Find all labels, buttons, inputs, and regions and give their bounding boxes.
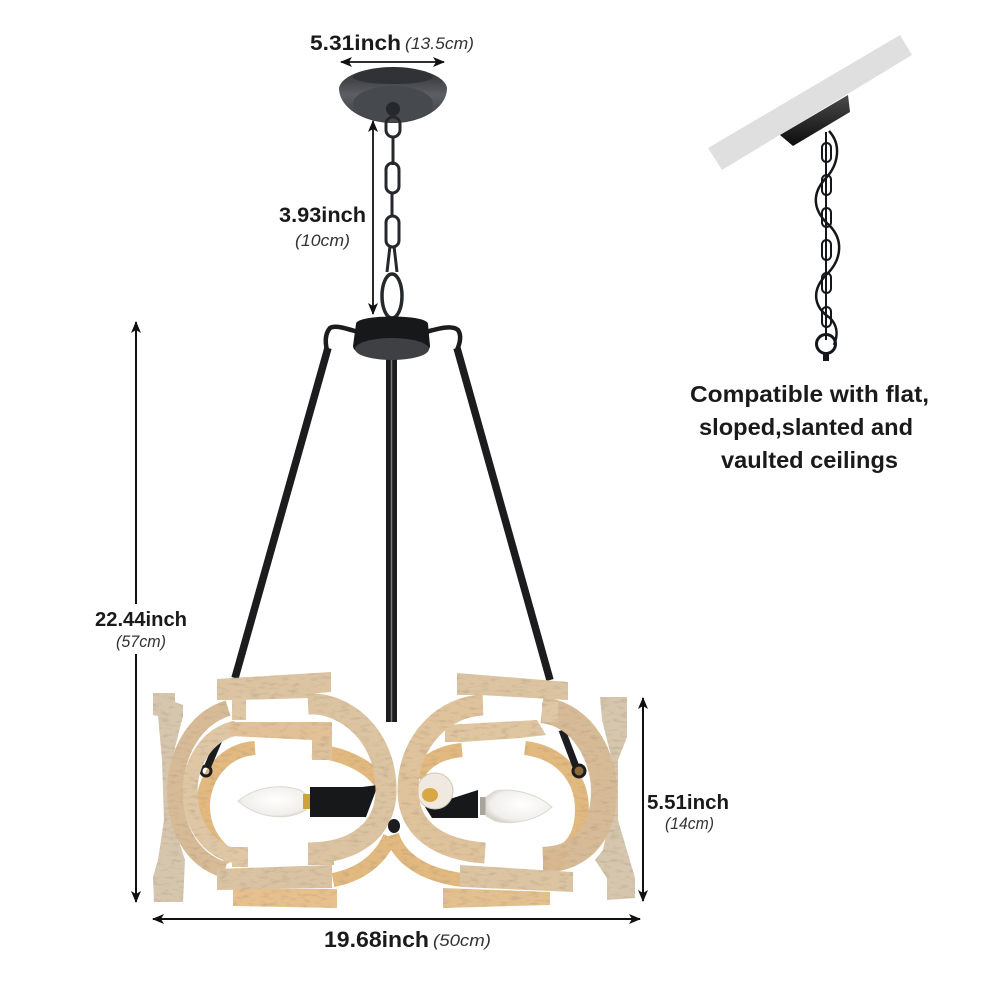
dimension: overall width xyxy=(153,919,640,952)
dimension: chain length xyxy=(279,121,373,314)
hanging chain xyxy=(382,117,402,318)
dimension: canopy width xyxy=(310,32,474,62)
dimension: shade height: (14cm) xyxy=(665,814,714,833)
central hub with arms xyxy=(326,316,460,360)
wood frame: far right end piece xyxy=(595,697,635,900)
right bulbs and socket xyxy=(417,773,552,823)
compatibility caption: Compatible with flat, xyxy=(690,381,929,407)
left bulb and socket xyxy=(238,785,378,817)
dimension: shade height xyxy=(643,698,729,901)
dimension: canopy width: 5.31inch xyxy=(310,32,401,55)
wood frame: back arcs xyxy=(203,748,582,880)
dimension: overall height: (57cm) xyxy=(116,632,166,651)
wood frame: far left end piece xyxy=(153,693,185,902)
support rods xyxy=(235,348,550,722)
ceiling canopy xyxy=(339,67,447,123)
dimension: overall height: 22.44inch xyxy=(95,609,187,631)
sloped ceiling illustration xyxy=(708,35,912,361)
left hanging hook xyxy=(201,728,224,776)
center finial xyxy=(388,819,400,833)
dimension: shade height: 5.51inch xyxy=(647,792,729,814)
dimension: canopy width: (13.5cm) xyxy=(405,34,474,53)
compatibility caption: sloped,slanted and xyxy=(699,414,913,440)
dimension: chain length: (10cm) xyxy=(295,231,350,250)
right hanging hook xyxy=(562,730,585,777)
dimension: overall height xyxy=(95,322,187,902)
dimension: overall width: (50cm) xyxy=(433,931,491,950)
compatibility caption xyxy=(690,381,929,473)
compatibility caption: vaulted ceilings xyxy=(721,447,898,473)
dimension: overall width: 19.68inch xyxy=(324,927,429,952)
wood frame: right ring and planks xyxy=(408,673,604,908)
dimension: chain length: 3.93inch xyxy=(279,204,366,227)
wood frame: left ring and planks xyxy=(175,672,386,908)
